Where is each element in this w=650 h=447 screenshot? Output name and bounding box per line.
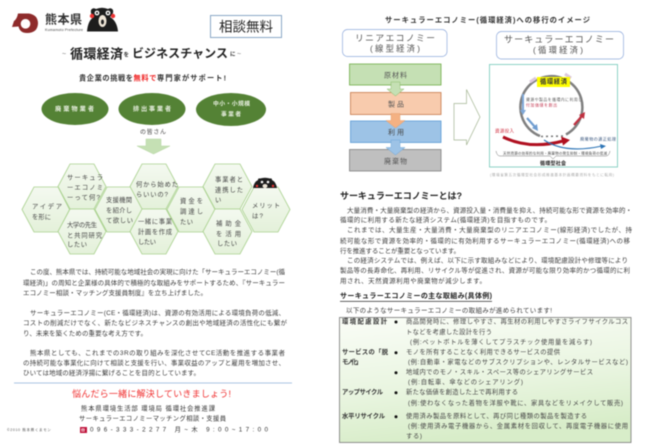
arrow: blue output curve: [544, 140, 602, 149]
row: servitization: モノを所有することなく利用できるサービスの提供: [406, 347, 561, 356]
row: upcycle: アップサイクル: [342, 387, 384, 396]
hexagon: university research: と共同研究: [67, 230, 103, 240]
flow: linear economy: [350, 64, 441, 171]
row: servitization: [342, 347, 628, 386]
hexagon: merit: [242, 187, 290, 232]
frame: [490, 64, 618, 167]
row: servitization: (例:自動車・家電などのサブスクリプションや、レンタルサービスなど): [408, 357, 628, 366]
hexagon cluster: [22, 164, 290, 254]
hexagon: idea: [22, 187, 70, 232]
hexagon: use subsidies: [203, 209, 252, 254]
text block: introduction: この度、熊本県では、持続可能な地域社会の実現に向けた「サーキュラーエコノミー(循: [30, 267, 286, 276]
label: resource input: 資源投入: [495, 128, 514, 134]
hexagon: what is circular economy: ーエコノミ: [67, 184, 103, 192]
heading: what is circular economy: サーキュラーエコノミーとは?: [340, 191, 462, 201]
hexagon: merit: は?: [252, 212, 263, 220]
contact block: サーキュラーエコノミーマッチング相談・支援員: [79, 414, 227, 422]
row: horizontal recycling: 水平リサイクル: [342, 411, 386, 420]
oval: emitters: [118, 93, 186, 125]
title: に: [230, 51, 236, 58]
target business ovals: [42, 93, 266, 126]
oval: small businesses: 中小・小規模: [213, 100, 250, 108]
hexagon: raise funds: 調達し: [180, 206, 203, 216]
row: environmental design: (例:ペットボトルを薄くしてプラスチック使用量を減らす): [410, 337, 592, 346]
text block: introduction: エコノミー相談・マッチング支援員制度』を立ち上げました。: [23, 288, 207, 297]
contact block: 096-333-2277 月~木 9:00~17:00: [90, 424, 268, 434]
text block: explanation: 循環的に利用する新たな経済システム(循環経済)を目指すものです。: [340, 215, 551, 224]
icon: phone: ☎: [81, 428, 85, 432]
subtitle: 無料で: [134, 74, 156, 82]
title: ~: [62, 51, 66, 58]
row: horizontal recycling: (例:使用済み電子機器から、金属素材を回収して、再度電子機器に使用: [408, 421, 628, 430]
hexagon: joint business plan: 計画を作成: [138, 227, 173, 236]
hexagon: where to start: らいいの?: [136, 190, 168, 198]
arrow: blue down: [386, 140, 405, 155]
hexagon: merit: メリット: [252, 202, 280, 210]
badge: free consultation: [210, 16, 282, 38]
oval: small businesses: 事業者: [221, 110, 241, 118]
inner text: 付加価値を創出: [526, 102, 557, 108]
text block: introduction: サーキュラーエコノミー(CE・循環経済)は、資源の有効活用による環境負荷の低減、: [30, 308, 285, 317]
row: servitization: (例:自転車、傘などのシェアリング): [408, 377, 523, 386]
row: environmental design: トなどを考慮した設計を行う: [406, 327, 492, 336]
hexagon: university research: したい: [67, 240, 87, 248]
title: ビジネスチャンス: [132, 46, 228, 60]
diagram: circular society: [490, 64, 618, 167]
small loop marks: [530, 74, 571, 82]
arrow: green down: [387, 82, 404, 96]
row: horizontal recycling: 使用済み製品を原料として、再び同じ種類の製品を製造する: [406, 411, 587, 420]
label: waste treatment: 廃棄物の適正処理: [580, 136, 617, 142]
hexagon: raise funds: 資金を: [180, 196, 203, 205]
hexagon: what is circular economy: [58, 164, 106, 209]
hexagon: joint business plan: [130, 209, 178, 254]
label box: circular economy: サーキュラーエコノミー: [504, 34, 614, 44]
title: ~: [237, 51, 241, 58]
source note: (環境省第五次循環型社会形成推進基本計画概要資料をもとに転用): [490, 172, 614, 177]
arrow: blue down: [522, 94, 524, 112]
text block: introduction: [23, 267, 288, 377]
hexagon: partner with businesses: 事業者と: [215, 174, 243, 184]
arrow: down green: [137, 139, 170, 154]
caption: 天然資源の効率的な利用・廃棄物の発生抑制・環境負荷の低減: [503, 150, 608, 156]
row: upcycle: 新たな価値を創造した上で再利用する: [406, 387, 518, 396]
arrow: blue diagonal: [527, 118, 535, 127]
ring: [520, 76, 582, 136]
hexagon: university research: 大学の先生: [67, 220, 97, 229]
arrow: red input curve: [503, 137, 563, 145]
label box: linear economy: (線型経済): [370, 44, 420, 54]
hexagon: raise funds: たい: [180, 218, 193, 226]
label box: circular economy: [496, 32, 624, 59]
badge: free consultation: 相談無料: [219, 20, 274, 34]
row: environmental design: 商品開発時に、修理しやすさ、再生材の利用しやすさライフサイクルコス: [406, 316, 628, 326]
box: waste: 廃棄物: [384, 156, 407, 166]
divider: [14, 382, 292, 384]
row: environmental design: 環境配慮設計: [342, 316, 388, 326]
text block: introduction: り、未来を築くための重要な考え方です。: [23, 328, 147, 338]
hexagon: joint business plan: したい: [138, 238, 156, 246]
text block: introduction: の持続可能な事業化に向けて相談と支援を行い、事業収益のアップと雇用を増加させ、: [23, 358, 285, 367]
box: raw materials: 原材料: [384, 70, 407, 80]
label box: linear economy: [342, 30, 447, 56]
lead sentence: 以下のようなサーキュラーエコノミーの取組みが進められています!: [346, 306, 552, 314]
row: upcycle: (例:使わなくなった着物を洋服や靴に、家具などをリメイクして販売): [408, 398, 623, 407]
prefecture name: 熊本県: [45, 12, 82, 26]
text block: explanation: 大量消費・大量廃棄型の経済から、資源投入量・消費量を抑え、持続可能な形で資源を効率的・: [347, 206, 632, 214]
box: products: 製品: [388, 100, 404, 108]
icon: Kumamon peeking: [253, 178, 277, 188]
oval: emitters: 排出事業者: [133, 105, 171, 113]
contact block: 熊本県環境生活部 環境局 循環社会推進課: [81, 404, 216, 412]
text block: explanation: 製品等の長寿命化、再利用、リサイクル等が促進され、資源が可能な限り効率的かつ循環的に利: [340, 266, 630, 274]
text block: explanation: 続可能な形で資源を効率的・循環的に有効利用するサーキュラーエコノミー(循環経済)への移: [340, 236, 630, 245]
text block: explanation: これまでは、大量生産・大量消費・大量廃棄型のリニアエコノミー(線形経済)でしたが、持: [347, 225, 632, 234]
text block: introduction: 環経済)」の周知と企業様の具体的で積極的な取組みをサポートするため、『サーキュラー: [23, 278, 285, 287]
hexagon: use subsidies: したい: [217, 240, 237, 248]
contact block: [79, 404, 268, 434]
hexagon: use subsidies: を活用: [216, 229, 241, 238]
copyright: ©2010 熊本県くまモン: [7, 427, 51, 432]
row: upcycle: [342, 387, 623, 407]
label: circular society: 循環型社会: [540, 160, 566, 167]
row: servitization: モノ化」: [342, 357, 362, 366]
icon: prefecture emblem: [12, 14, 38, 33]
box: use: 利用: [388, 128, 404, 136]
callout: let's solve together: 悩んだら一緒に解決していきましょう!: [72, 388, 231, 399]
ring gap dots: [541, 135, 566, 138]
hexagon: support agency: [95, 187, 143, 232]
text block: explanation: [340, 206, 632, 285]
hexagon: partner with businesses: [203, 164, 252, 209]
subtitle: [79, 74, 226, 82]
title: を: [124, 50, 129, 58]
text block: introduction: 熊本県としても、これまでの3Rの取り組みを深化させてCE活動を推進する事業者: [30, 348, 286, 357]
bracket: [496, 151, 610, 159]
arrow: orange down: [386, 114, 405, 128]
title: 循環経済: [70, 46, 123, 62]
icon: phone: [80, 427, 87, 433]
label box: linear economy: リニアエコノミー: [355, 33, 435, 43]
text block: explanation: 用され、天然資源利用や廃棄物が減少します。: [340, 276, 486, 285]
row: horizontal recycling: [342, 411, 628, 440]
hexagon: idea: アイデア: [32, 202, 62, 210]
text block: explanation: この経済システムでは、例えば、以下に示す取組みなどにより、環境配慮設計や修理等により: [347, 256, 628, 264]
row: servitization: サービスの「脱: [342, 347, 389, 356]
hexagon: partner with businesses: 連携した: [215, 185, 243, 194]
row: servitization: 地域内でのモノ・スキル・スペース等のシェアリングサービス: [406, 367, 593, 376]
hexagon: idea: を形に: [32, 213, 51, 221]
heading: image of the transition: サーキュラーエコノミー(循環経済)への移行のイメージ: [385, 16, 590, 24]
text block: explanation: 行を推進することが重要となっています。: [340, 246, 460, 255]
oval: waste businesses: [42, 93, 108, 125]
subtitle: 貴企業の挑戦を: [79, 74, 133, 82]
hexagon: where to start: 何から始めた: [136, 180, 178, 188]
oval: waste businesses: 廃棄物業者: [55, 105, 94, 113]
oval: small businesses: [196, 93, 266, 126]
arrow: red diagonal: [574, 116, 582, 125]
hexagon: university research: [58, 209, 106, 254]
text block: introduction: コストの削減だけでなく、新たなビジネスチャンスの創出や地域経済の活性化にも繋が: [23, 318, 288, 327]
title: [62, 46, 241, 62]
panel: initiatives table: [340, 316, 631, 442]
yellow label: 循環経済: [540, 76, 568, 86]
hexagon: support agency: を紹介し: [106, 206, 132, 214]
subtitle: 専門家がサポート!: [157, 74, 226, 82]
hexagon: support agency: 支援機関: [106, 195, 132, 204]
row: horizontal recycling: する): [406, 432, 422, 440]
hexagon: where to start: [130, 164, 178, 209]
hexagon: support agency: て欲しい: [106, 216, 133, 224]
hexagon: partner with businesses: い: [215, 196, 221, 204]
hexagon: what is circular economy: サーキュラ: [67, 174, 103, 182]
hexagon: joint business plan: 一緒に事業: [138, 216, 173, 226]
hexagon: what is circular economy: ーって何?: [67, 192, 100, 202]
logo: Kumamoto Prefecture: [12, 12, 83, 33]
caption: everyone: の皆さん: [140, 128, 166, 136]
hexagon: raise funds: [167, 187, 215, 232]
hexagon: use subsidies: 補助金: [216, 218, 242, 228]
label box: circular economy: (循環経済): [533, 45, 583, 55]
arrow: transition outline: [454, 90, 480, 145]
inner text: [526, 97, 582, 108]
inner text: 資源や製品を循環内に利用し: [526, 97, 582, 102]
subheading: main initiatives: サーキュラーエコノミーの主な取組み(具体例): [340, 291, 492, 300]
text block: introduction: ひいては地域の経済浮揚に繋げることを目的としています。: [23, 368, 200, 377]
icon: Kumamon mascot: [87, 8, 118, 32]
row: environmental design: [342, 316, 628, 346]
prefecture name in English: Kumamoto Prefecture: [45, 28, 83, 32]
